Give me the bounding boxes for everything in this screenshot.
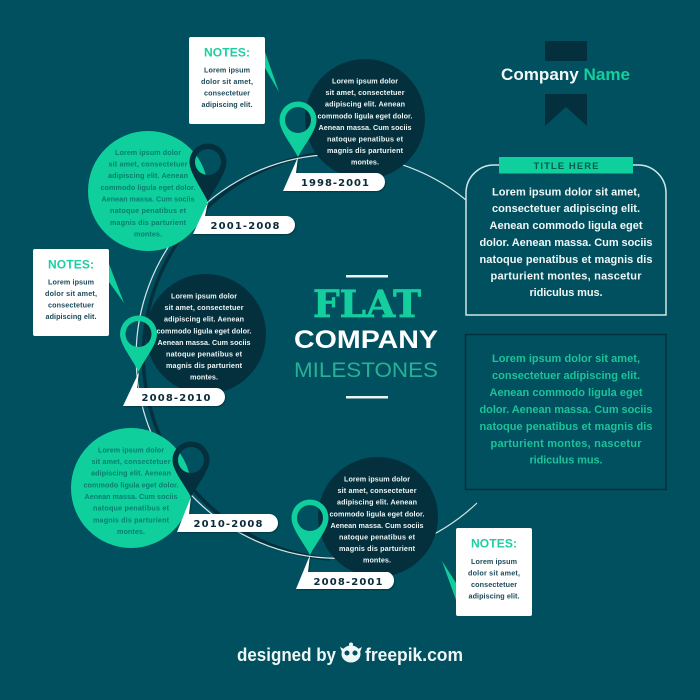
text circle 4: montes. (117, 527, 145, 536)
title bar: TITLE HERE (534, 161, 598, 172)
text circle 3 (146, 274, 266, 394)
text circle 1: commodo ligula eget dolor. (318, 112, 412, 120)
text circle 1 (305, 59, 425, 179)
date label 2008-2001: 2008-2001 (314, 577, 383, 588)
panel: dark outlined text: consectetuer adipiscing elit. (492, 370, 640, 382)
text circle 2: Lorem ipsum dolor (115, 148, 181, 157)
text circle 1: montes. (351, 158, 379, 166)
icon: pin 1 (280, 102, 316, 157)
text circle 1: sit amet, consectetuer (326, 88, 405, 97)
central title (294, 275, 438, 398)
panel: dark outlined text: ridiculus mus. (530, 454, 602, 466)
milestone 2001-2008 (88, 131, 295, 251)
notes card left: Lorem ipsum (48, 278, 94, 286)
text circle 3: Aenean massa. Cum sociis (158, 338, 250, 347)
date label 1998-2001: 1998-2001 (301, 178, 369, 189)
company name: Company Name (501, 65, 630, 84)
text circle 5: montes. (363, 556, 391, 564)
text circle 4: commodo ligula eget dolor. (84, 480, 178, 490)
text circle 5 (318, 457, 438, 577)
text circle 1: magnis dis parturient (327, 146, 404, 155)
text circle 5: Aenean massa. Cum sociis (330, 521, 424, 530)
icon: pin 2 (190, 144, 226, 202)
text circle 2: adipiscing elit. Aenean (108, 171, 188, 180)
central title: COMPANY (294, 326, 438, 354)
central title: MILESTONES (294, 359, 438, 382)
text circle 4: adipiscing elit. Aenean (91, 468, 171, 478)
text circle 1: Aenean massa. Cum sociis (318, 123, 412, 132)
notes card left: adipiscing elit. (46, 312, 96, 321)
text circle 2: Aenean massa. Cum sociis (102, 194, 194, 204)
text circle 3: natoque penatibus et (166, 350, 243, 358)
text circle 2: montes. (134, 230, 162, 238)
text circle 3: sit amet, consectetuer (164, 303, 244, 312)
text circle 5: Lorem ipsum dolor (344, 474, 410, 484)
panel: dark outlined text: Lorem ipsum dolor sit amet, (492, 353, 640, 365)
text circle 4: Lorem ipsum dolor (98, 446, 164, 454)
footer credit: freepik.com (365, 645, 463, 665)
panel text: Lorem ipsum dolor sit amet, (492, 186, 640, 198)
notes card top: adipiscing elit. (202, 100, 252, 109)
panel: dark outlined text: natoque penatibus et magnis dis (480, 421, 652, 433)
footer credit: designed by (237, 645, 336, 665)
milestone 2008-2001 (292, 457, 438, 589)
icon: freepik mascot (340, 642, 362, 662)
text circle 4: sit amet, consectetuer (92, 457, 171, 466)
milestone 1998-2001 (280, 59, 425, 191)
text circle 1: adipiscing elit. Aenean (325, 100, 405, 108)
icon: ribbon top (545, 41, 587, 61)
panel text: natoque penatibus et magnis dis (480, 254, 652, 266)
notes card left: dolor sit amet, (45, 289, 97, 298)
text circle 4 (71, 428, 191, 548)
text circle 4: Aenean massa. Cum sociis (84, 492, 178, 501)
timeline arc (136, 154, 477, 559)
central title: FLAT (313, 282, 421, 326)
panel: dark outlined text: Aenean commodo ligula eget (490, 387, 643, 399)
notes card bottom: NOTES: (471, 536, 517, 550)
notes card bottom: adipiscing elit. (468, 592, 520, 600)
panel text: Aenean commodo ligula eget (490, 220, 643, 232)
text circle 4: magnis dis parturient (93, 516, 170, 524)
icon: ribbon bottom (545, 94, 587, 126)
milestone 2010-2008 (71, 428, 278, 548)
text circle 5: sit amet, consectetuer (338, 486, 417, 495)
notes card left: consectetuer (48, 300, 94, 310)
date label 2008-2010 (123, 372, 225, 406)
text circle 3: commodo ligula eget dolor. (156, 326, 252, 336)
text circle 2 (88, 131, 208, 251)
text circle 4: natoque penatibus et (93, 504, 170, 512)
text circle 2: sit amet, consectetuer (108, 160, 188, 168)
text circle 5: natoque penatibus et (339, 532, 416, 542)
text circle 5: magnis dis parturient (339, 544, 416, 553)
company logo (501, 41, 630, 126)
date label 1998-2001 (283, 157, 385, 191)
panel text: consectetuer adipiscing elit. (492, 203, 640, 215)
text circle 5: commodo ligula eget dolor. (330, 510, 424, 518)
title bar (499, 157, 633, 174)
panel text: dolor. Aenean massa. Cum sociis (480, 237, 652, 249)
notes card top: Lorem ipsum (204, 66, 250, 74)
icon: pin 3 (120, 316, 157, 372)
date label 2008-2010: 2008-2010 (142, 393, 211, 404)
notes card bottom: dolor sit amet, (468, 568, 520, 578)
text circle 2: natoque penatibus et (110, 206, 187, 215)
text circle 3: montes. (190, 372, 218, 382)
text circle 1: Lorem ipsum dolor (332, 76, 398, 86)
panel: title here (466, 157, 666, 315)
date label 2010-2008 (177, 497, 278, 532)
text circle 3: adipiscing elit. Aenean (164, 314, 244, 324)
notes card top: dolor sit amet, (201, 77, 253, 86)
notes card top: consectetuer (204, 88, 250, 98)
milestone 2008-2010 (120, 274, 266, 406)
date label 2008-2001 (296, 555, 394, 589)
notes card left: NOTES: (48, 258, 94, 272)
icon: pin 4 (172, 442, 210, 497)
icon: pin 5 (292, 500, 328, 555)
text circle 5: adipiscing elit. Aenean (337, 498, 417, 506)
panel text: ridiculus mus. (530, 287, 602, 299)
notes card bottom: consectetuer (471, 580, 517, 589)
date label 2001-2008: 2001-2008 (210, 221, 280, 232)
panel: dark outlined text: parturient montes, nascetur (490, 438, 642, 450)
date label 2001-2008 (193, 202, 295, 234)
text circle 2: magnis dis parturient (110, 218, 187, 227)
text circle 3: Lorem ipsum dolor (171, 292, 237, 300)
panel text (480, 186, 652, 299)
text circle 2: commodo ligula eget dolor. (100, 183, 196, 192)
text circle 1: natoque penatibus et (327, 134, 404, 144)
text circle 3: magnis dis parturient (166, 361, 243, 370)
notes card bottom (442, 528, 532, 616)
notes card top (189, 37, 279, 124)
notes card left (33, 249, 124, 336)
panel: dark outlined text (466, 334, 666, 490)
panel: dark outlined text: dolor. Aenean massa. Cum sociis (480, 404, 652, 416)
date label 2010-2008: 2010-2008 (194, 519, 263, 530)
footer credit (237, 642, 463, 665)
panel text: parturient montes, nascetur (490, 270, 642, 282)
notes card top: NOTES: (204, 46, 250, 60)
notes card bottom: Lorem ipsum (471, 557, 517, 566)
